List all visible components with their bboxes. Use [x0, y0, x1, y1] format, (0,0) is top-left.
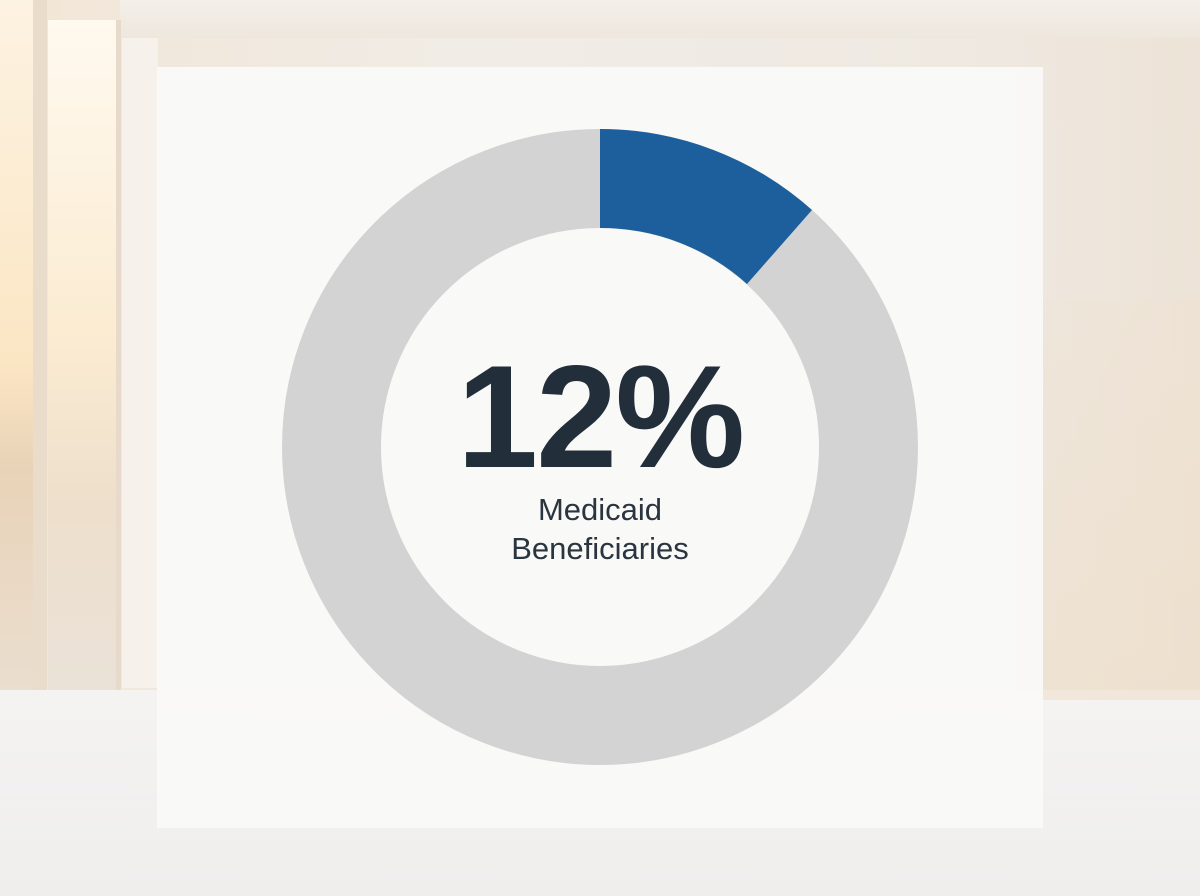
ceiling — [120, 0, 1200, 38]
label: Medicaid Beneficiaries: Medicaid — [538, 492, 662, 527]
floor — [0, 690, 1200, 896]
wall near window — [122, 38, 158, 688]
window frame — [33, 0, 47, 715]
label: Medicaid Beneficiaries — [511, 492, 689, 566]
label: Medicaid Beneficiaries: Beneficiaries — [511, 531, 689, 566]
panel: chart card — [157, 67, 1043, 828]
window left pane — [0, 0, 36, 720]
window right pane — [48, 20, 121, 710]
segment: 12% — [600, 129, 812, 284]
ring: remainder — [332, 178, 868, 716]
light streak — [1040, 300, 1200, 700]
big number: 12%: 12% — [457, 335, 743, 498]
